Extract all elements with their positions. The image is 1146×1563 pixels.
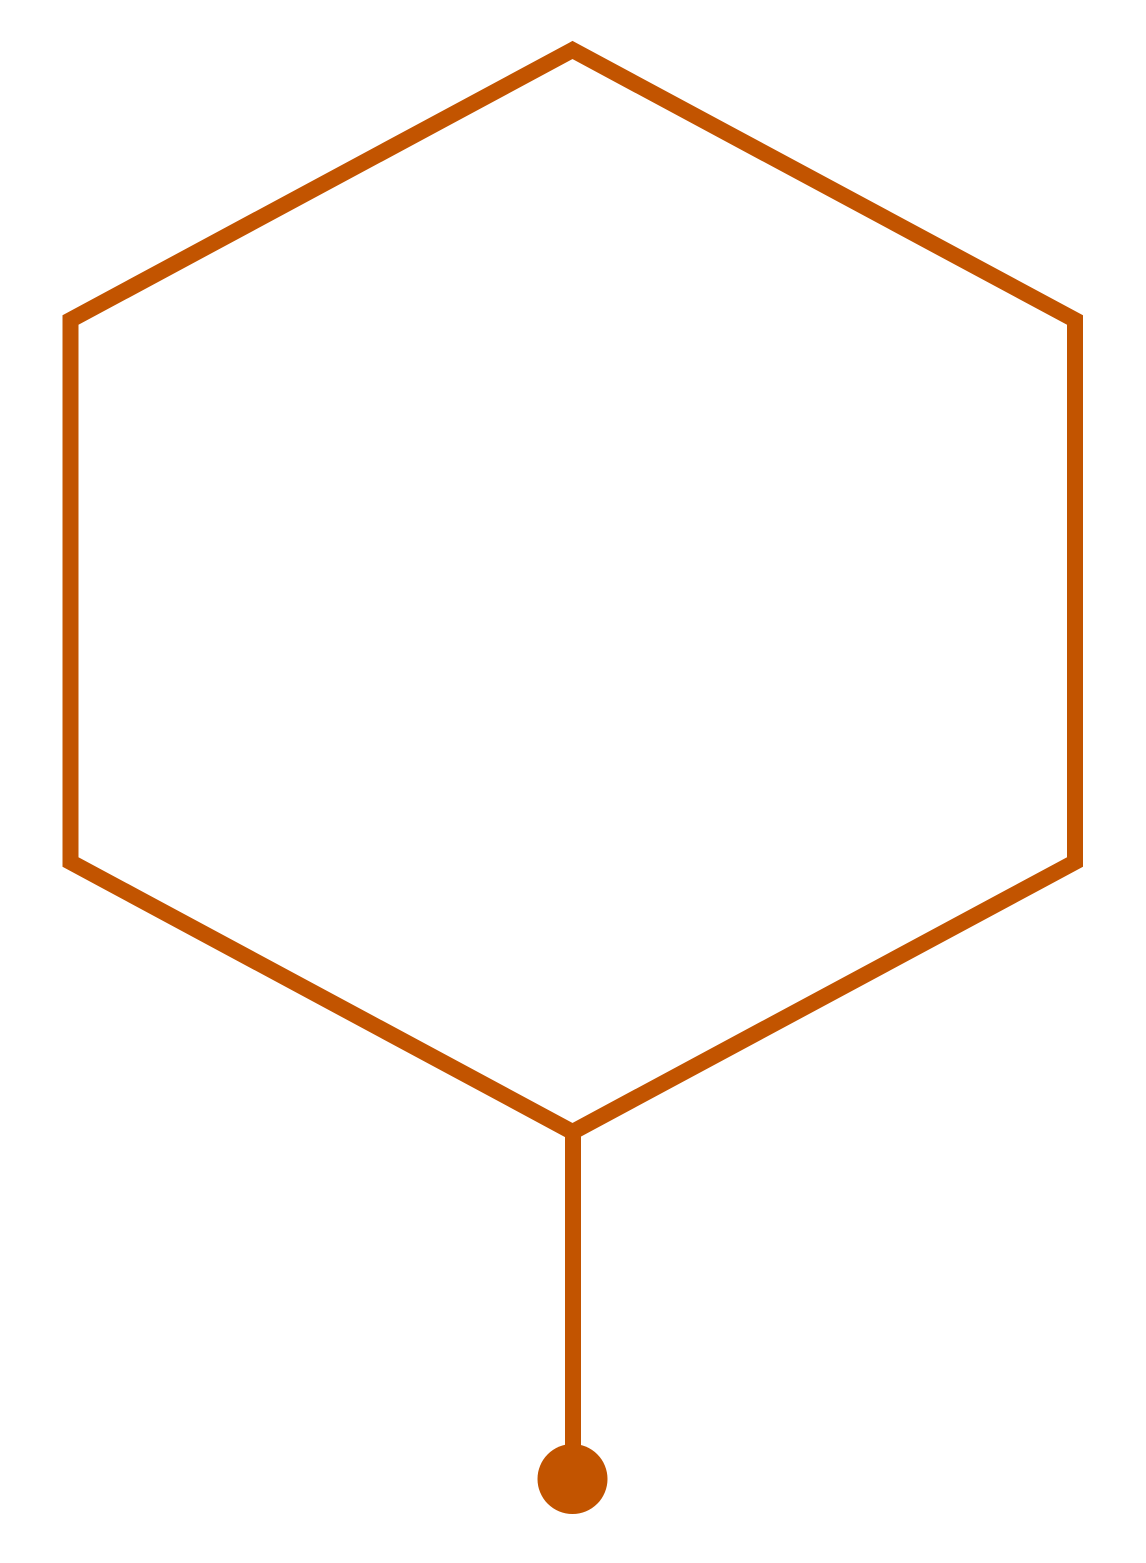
stem line [565,1132,581,1470]
hexagon outline [70,50,1075,1132]
end dot [538,1444,608,1514]
